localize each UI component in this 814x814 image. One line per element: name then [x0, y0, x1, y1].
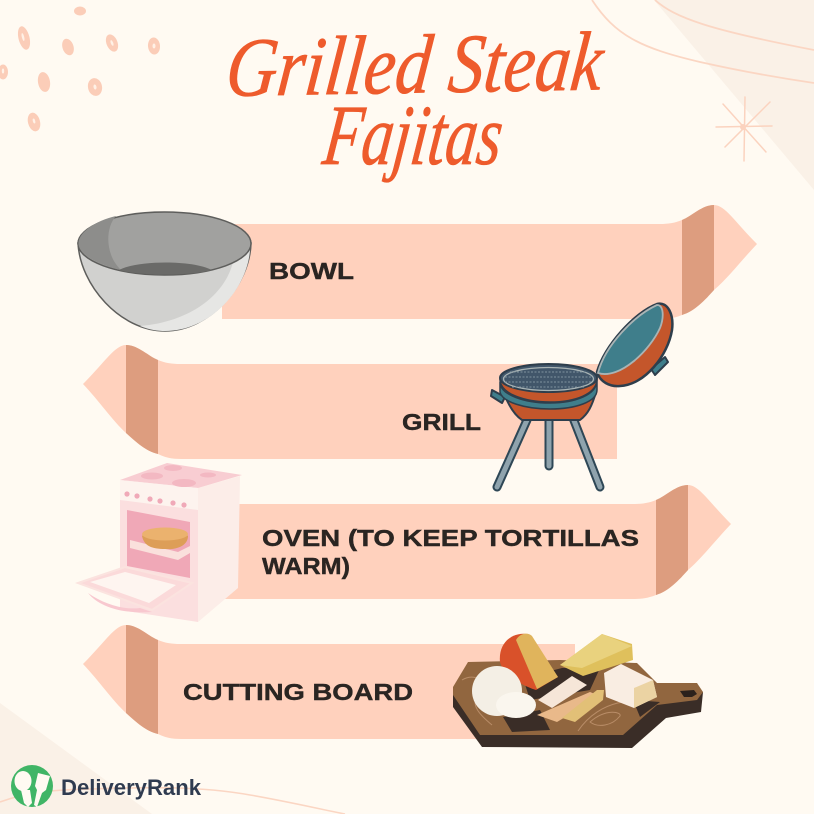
icon: grill — [491, 304, 672, 487]
label: grill: GRILL — [402, 409, 481, 435]
white cheese round — [472, 666, 522, 716]
title: Fajitas — [318, 87, 508, 183]
panel: oven ribbon — [225, 485, 731, 599]
oven window — [127, 510, 190, 578]
grill legs — [497, 418, 600, 487]
panel: cutting board ribbon — [83, 625, 575, 739]
knobs — [124, 491, 187, 508]
title: Grilled Steak — [222, 16, 609, 115]
grill lid — [651, 357, 668, 375]
panel: bowl ribbon — [222, 205, 757, 319]
logo — [11, 765, 201, 807]
crackers — [538, 676, 587, 708]
icon: star sparkle — [716, 97, 772, 161]
white cheese block — [604, 664, 657, 708]
icon: oven — [78, 463, 242, 622]
label: cutting board: CUTTING BOARD — [183, 679, 413, 705]
label: oven second line: WARM) — [262, 553, 350, 579]
red cheese wedge — [500, 634, 558, 690]
icon: cutting board with cheese — [453, 634, 703, 748]
label: bowl: BOWL — [269, 258, 354, 284]
panel: grill ribbon — [83, 345, 617, 459]
shadows — [503, 668, 660, 732]
yellow cheese wedge — [560, 634, 633, 676]
label: oven: OVEN (TO KEEP TORTILLAS — [262, 525, 639, 551]
oven door — [78, 567, 192, 610]
grill body — [505, 392, 596, 420]
pie — [142, 529, 188, 549]
decorative dots — [0, 6, 161, 133]
icon: bowl — [78, 212, 251, 331]
logo wordmark: DeliveryRank — [61, 775, 201, 800]
logo icon — [11, 765, 53, 807]
title — [222, 16, 609, 183]
burners — [141, 465, 216, 487]
